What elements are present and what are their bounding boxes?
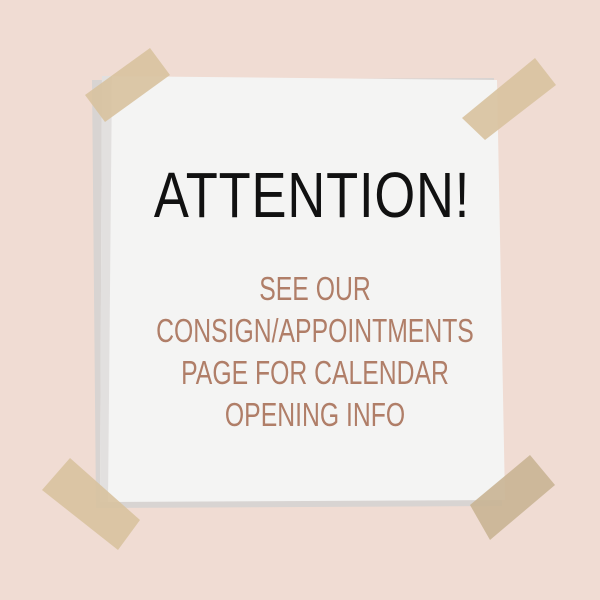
message text: SEE OUR: [259, 270, 371, 307]
title: ATTENTION!: [154, 159, 470, 231]
tape: bottom-right: [470, 455, 555, 540]
message text: OPENING INFO: [225, 396, 405, 433]
message text: [156, 270, 474, 433]
tape: top-left: [85, 48, 170, 122]
message text: CONSIGN/APPOINTMENTS: [156, 312, 474, 349]
tape: top-right: [462, 58, 556, 140]
message text: PAGE FOR CALENDAR: [181, 354, 449, 391]
tape: bottom-left: [42, 458, 140, 550]
